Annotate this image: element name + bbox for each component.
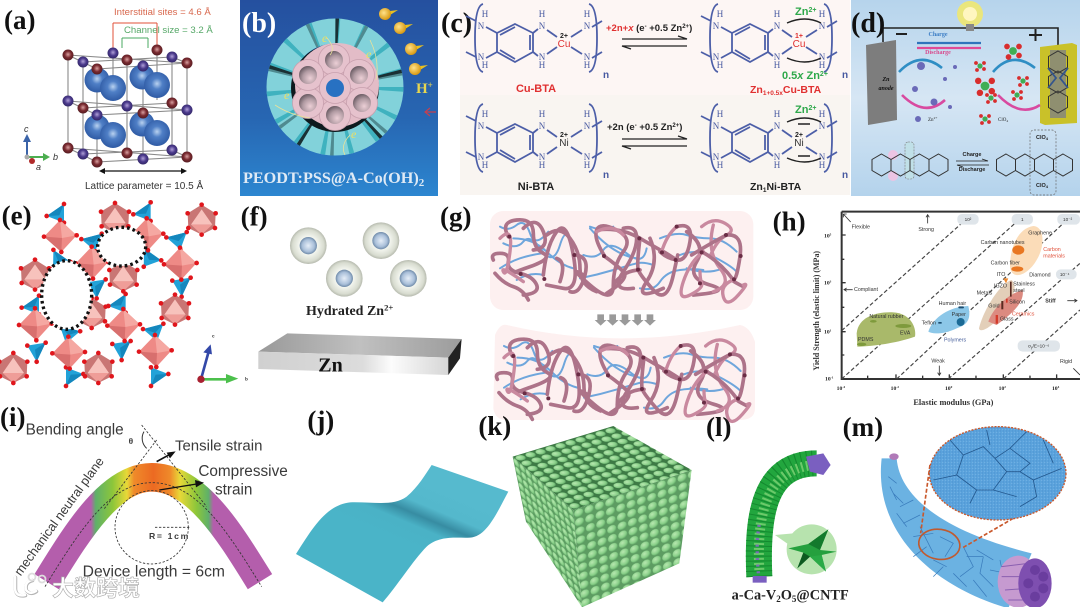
ion cycle arcs [899,60,1040,110]
panel g: polymer network [440,202,755,421]
tick labels: -2 [896,385,899,389]
small lattice atoms [62,44,192,168]
pill labels: σ [1028,344,1031,349]
upper reaction label: +0.5 Zn [647,23,682,34]
Zn Ni-BTA structure: HNHNHNHNHNHN [713,109,826,170]
labels: mechanical neutral plane [11,454,107,578]
compression arrows [595,314,656,326]
label e: (e) [2,200,32,230]
magnified surface [921,427,1066,548]
material and direction labels [852,224,1072,365]
panel a: crystal lattice [4,5,213,192]
material and direction labels: Natural rubber [869,314,904,320]
lower reaction label: - [635,123,637,129]
tick labels: 10 [825,377,831,383]
label f: (f) [241,202,268,232]
lattice dimension labels: Channel size = 3.2 Å [124,25,213,36]
striped outer ring [279,31,391,143]
Zn Cu-BTA structure [701,4,848,97]
upper tangled chains [492,220,746,302]
watermark [15,574,140,601]
bending angle mark [142,432,147,448]
lattice dimension labels: Interstitial sites = 4.6 Å [114,7,211,18]
tick labels: 3 [830,280,832,284]
lower reaction label: +0.5 Zn [637,122,673,133]
tick labels: 10 [824,329,830,335]
Ni-BTA structure: 2+ [560,132,568,139]
caption: 5 [792,594,797,604]
label h: (h) [773,207,806,237]
Zn Ni-BTA structure: 2+ [795,132,803,139]
zinc slab: Zn [318,355,343,377]
Zn ions [912,62,957,122]
pill labels: /E=10⁻⁶ [1033,344,1049,349]
labels: strain [215,482,252,499]
pink nanotube bundle [291,43,379,132]
fiber cracks [888,477,1007,597]
material and direction labels: Teflon [922,320,936,326]
Zn Cu-BTA structure: n [842,70,848,81]
redox molecules: Charge [963,152,981,158]
pill labels [957,214,1080,352]
label l: (l) [706,412,731,442]
panel e: octahedral framework [0,200,248,388]
protons [379,8,433,97]
tick labels: 2 [1004,385,1006,389]
Ni-BTA structure: HNHNHNHNHNHN [478,109,591,170]
upper reaction label: ) [689,23,692,34]
charge and discharge arrows: Charge [928,32,948,38]
material and direction labels: Flexible [852,224,870,230]
lower tangled chains [496,339,750,421]
tick labels: 10 [891,386,896,392]
material and direction labels: Silicon [1009,299,1025,305]
lattice dimension labels [85,7,213,192]
fiber end bundle [998,556,1052,607]
watermark logo [15,574,46,596]
ion legend: 2+ [934,116,937,120]
panel l: coated carbon nanotube fiber [706,412,849,604]
axes: a [36,162,41,172]
ion legend: 4 [1006,119,1008,123]
Zn Cu-BTA structure: Zn [795,6,808,18]
labels: Tensile strain [175,438,262,455]
Ni-BTA structure: Ni-BTA [518,181,554,193]
material and direction labels: Strong [918,227,934,233]
electron paths: e [322,31,328,45]
axes: b [245,376,248,381]
tick labels: 0 [951,385,953,389]
ClO4 ions [974,44,1029,125]
fiber ends [753,453,831,583]
tick labels: 1 [830,328,832,332]
label c: (c) [441,8,472,39]
Ni-BTA structure [466,104,609,193]
label m: (m) [843,412,883,442]
zinc anode: Zn [881,77,890,83]
zinc anode [866,40,897,125]
lower network background [493,325,755,420]
material and direction labels: Paper [952,312,966,318]
material and direction labels: Ceramics [1012,311,1035,317]
redox molecules: ClO [1036,135,1046,141]
material and direction labels: Rigid [1060,359,1072,365]
label k: (k) [478,411,511,441]
polarity signs [896,29,1042,41]
tick labels: -1 [831,376,834,380]
material and direction labels: Weak [931,359,945,365]
caption: a-Ca-V [732,587,776,603]
Cu-BTA structure: Cu [558,39,570,50]
ion legend [928,116,1008,123]
Zn Ni-BTA structure: Zn [795,104,808,116]
label d: (d) [851,8,885,39]
label b: (b) [242,8,276,39]
lattice dimension labels: Lattice parameter = 10.5 Å [85,179,203,192]
lower reaction label: +2n (e [607,122,635,133]
material and direction labels: Carbon [1043,247,1061,253]
hydrated ions [290,222,427,297]
upper reaction label: 2+ [682,24,690,30]
tick labels: 5 [830,232,832,236]
axis titles [812,251,994,407]
redox molecules: 4 [1046,136,1049,141]
Cu-BTA structure: HNHNHNHNHNHN [478,9,591,70]
panel h: Ashby chart [773,207,1080,407]
upper network background [490,211,753,310]
electron paths: e [366,47,372,61]
dashed strength lines [842,223,1080,379]
material and direction labels: Graphene [1028,231,1052,237]
blue fiber body [881,458,1032,607]
panel c: BTA redox chemistry [441,0,850,195]
Zn Ni-BTA structure [701,104,848,194]
blue tetrahedra [19,200,200,388]
pink octahedra [0,201,218,385]
Cu-BTA structure: Cu-BTA [516,83,556,95]
material and direction labels: IGZO [994,284,1007,290]
hydrated label: Hydrated Zn [306,304,384,319]
Ni-BTA structure: n [603,170,609,181]
material and direction labels: Glass [1000,317,1014,323]
tick labels: 10 [945,386,951,392]
protons: + [428,80,433,90]
background [851,0,1080,196]
yellow cathode [1040,43,1077,125]
circuit wire and light bulb [883,1,1058,47]
labels: Device length = 6cm [83,564,225,581]
electron paths: e [351,127,357,141]
nanoparticle cube [513,426,692,607]
ion legend: ClO [998,118,1006,123]
Zn Ni-BTA structure: 1 [763,187,767,194]
panel i: bending strain diagram [0,402,288,587]
Zn Ni-BTA structure: Ni [794,138,804,149]
material and direction labels: Stainless [1013,281,1035,287]
pill labels: 10⁻² [1063,217,1073,222]
pill labels: 10⁻⁴ [1060,272,1069,277]
material and direction labels: Gold [988,303,1000,309]
material and direction labels: Carbon nanotubes [981,240,1025,246]
caption: 2 [776,594,781,604]
labels: θ [129,436,134,446]
axes frame [842,212,1080,379]
equilibrium arrows [622,36,687,149]
panel f: hydrated Zn ions over zinc [241,202,462,377]
tick labels: 10 [999,386,1004,392]
label j: (j) [307,405,334,435]
lower reaction label: 2+ [672,123,680,129]
wavy sheet [296,465,508,602]
Zn Cu-BTA structure: 1+ [795,33,803,40]
Zn Ni-BTA structure: Ni-BTA [766,181,802,193]
caption: 2 [419,177,425,189]
material and direction labels: Human hair [939,301,966,307]
redox molecules: ClO [1036,183,1046,189]
panel j: flexible wave sheet [296,405,508,602]
caption: @CNTF [796,587,849,603]
zinc slab [258,333,462,377]
zinc anode: anode [878,86,894,92]
labels: R= 1cm [149,531,189,541]
axes [197,334,248,383]
redox molecules: 4 [1046,184,1049,189]
axes: c [212,334,215,339]
tick labels: 10 [824,233,830,239]
axes: b [53,152,58,162]
direction arrows [843,214,1080,375]
tick labels: 10 [837,386,842,392]
ion legend: Zn [928,118,934,123]
Zn Cu-BTA structure: 1+0.5x [763,90,783,97]
material and direction labels: materials [1043,253,1065,259]
axes [23,124,58,172]
axes: c [24,124,29,134]
blue background [240,0,438,196]
protons: H [416,81,428,97]
material and direction labels: Diamond [1029,272,1051,278]
panel m: cracked coated fiber [843,412,1066,607]
Zn Cu-BTA structure: HNHNHNHNHNHN [713,9,826,70]
charge and discharge arrows: Discharge [925,50,951,56]
pill labels: 1 [1021,217,1024,222]
Zn Cu-BTA structure: Zn [750,84,763,96]
material and direction labels: PDMS [858,337,874,343]
tick labels [824,232,1060,392]
large blue spheres [84,64,170,148]
Zn Ni-BTA structure: Zn [750,181,763,193]
panel b: PEDOT:PSS coated nanotubes [240,0,438,196]
pill labels: 10² [965,217,972,222]
labels [11,422,288,581]
material and direction labels: Polymers [944,337,967,343]
tick labels: 4 [1058,385,1060,389]
redox molecules: Discharge [959,167,985,173]
panel background [460,0,850,195]
red arrow [425,108,436,116]
material and direction labels: Stiff [1045,298,1056,304]
material regions [857,226,1043,347]
Cu-BTA structure: n [603,70,609,81]
labels: Compressive [198,463,288,480]
material and direction labels: steel [1013,288,1025,294]
label i: (i) [0,402,25,432]
fiber tip [889,453,899,460]
redox molecules [872,130,1072,195]
lattice parameter arrow [99,168,187,174]
watermark text: 大数跨境 [52,576,140,601]
caption: PEODT:PSS@A-Co(OH) [243,169,419,187]
upper reaction label: - [645,24,647,30]
Zn Ni-BTA structure: 2+ [808,105,816,112]
pill labels: y [1031,346,1033,350]
material and direction labels: Carbon fiber [991,261,1020,267]
panel d: Zn battery schematic [851,0,1080,196]
magnified region ring [917,527,962,562]
star crystal inset [775,524,837,574]
hydrated label: 2+ [384,302,393,312]
caption: O [781,587,792,603]
electron paths [275,31,377,155]
tick labels: 10 [824,281,830,287]
material and direction labels: EVA [900,330,911,336]
material and direction labels: Metals [977,291,993,297]
label a: (a) [4,5,35,35]
panel k: cube of spheres [478,411,692,607]
strain arrows [157,451,204,490]
labels: Bending angle [26,422,124,439]
upper reaction label: +2n+x (e [606,23,645,34]
dotted pore outlines [42,227,146,329]
bent green fiber [757,463,817,577]
lower reaction label: ) [679,122,682,133]
Cu-BTA structure: 2+ [560,33,568,40]
Zn Cu-BTA structure: Cu-BTA [783,84,822,96]
material and direction labels: ITO [997,272,1005,278]
electron paths: e [284,88,290,102]
tick labels: 10 [1052,386,1058,392]
Zn Cu-BTA structure: 0.5x Zn [782,70,820,82]
axis titles: Elastic modulus (GPa) [913,398,994,407]
Zn Cu-BTA structure: 2+ [808,7,816,14]
label g: (g) [440,202,471,232]
strain gradient arch [47,477,260,582]
Zn Cu-BTA structure: 2+ [820,71,828,78]
Ni-BTA structure: Ni [559,138,569,149]
axis titles: Yield Strength (elastic limit) (MPa) [812,251,821,371]
lattice framework lines [68,50,187,162]
Zn Ni-BTA structure: n [842,170,848,181]
Cu-BTA structure [466,4,609,95]
charge and discharge arrows [917,32,981,56]
Zn Cu-BTA structure: Cu [793,39,805,50]
bend radius circle and neutral plane [45,425,262,587]
tick labels: -4 [842,385,845,389]
material and direction labels: Compliant [854,287,878,293]
